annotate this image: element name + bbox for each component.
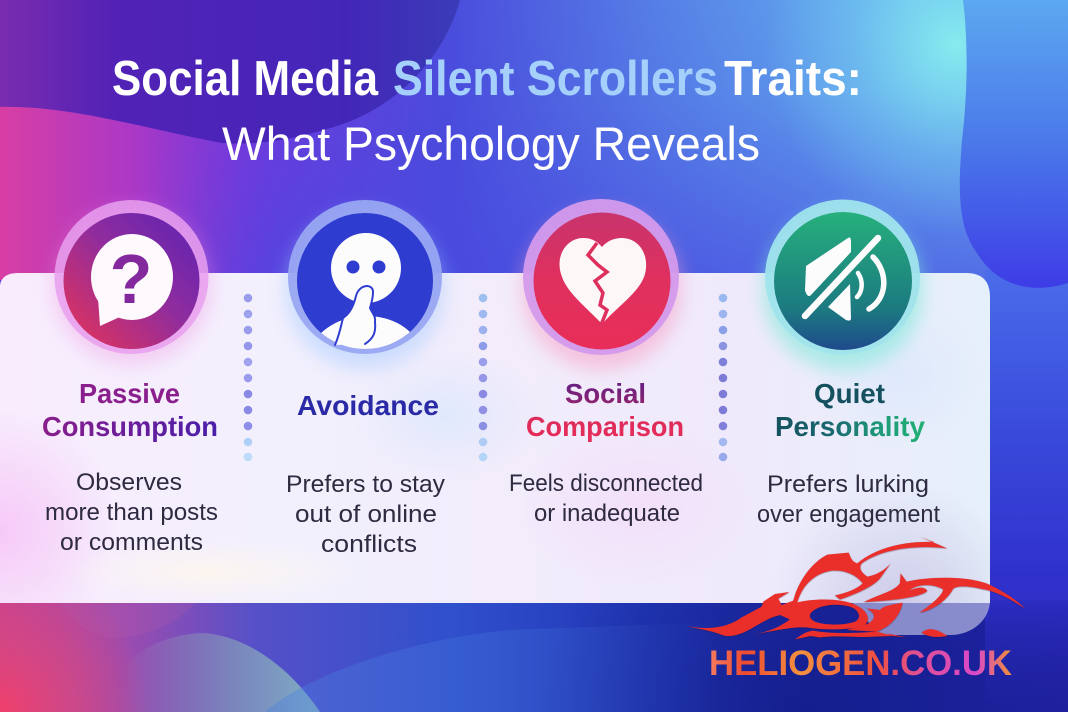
text: avoidance description: out of online [295, 501, 437, 528]
text: passive description: Observes [76, 469, 182, 496]
divider dots 1 [244, 294, 252, 461]
heading: quiet personality: Quiet [814, 378, 885, 409]
text: passive description: or comments [60, 529, 203, 556]
heading: quiet personality [775, 378, 925, 442]
shape: pink wave [0, 107, 300, 280]
heading: social comparison: Social [565, 378, 646, 409]
text: avoidance description [286, 471, 445, 558]
divider dots 2 [479, 294, 487, 461]
text: passive description: more than posts [45, 499, 218, 526]
title [112, 52, 862, 170]
heading: avoidance: Avoidance [297, 390, 439, 421]
divider dots 3 [719, 294, 727, 461]
title: Silent Scrollers [393, 52, 718, 106]
icon: broken heart [534, 212, 670, 350]
column: social comparison [509, 199, 703, 527]
column: passive consumption [42, 200, 218, 556]
logo: tribal flame mark [687, 537, 1025, 639]
text: social description: Feels disconnected [509, 470, 703, 497]
title: Traits: [724, 52, 862, 106]
shape: right strip [985, 270, 1068, 712]
shape: top-left dark blob [0, 0, 460, 144]
shape: right blob [960, 0, 1068, 288]
heading: passive consumption: Passive [79, 378, 180, 409]
text: passive description [45, 469, 218, 556]
text: social description: or inadequate [534, 500, 680, 527]
title: Social Media [112, 52, 379, 106]
panel [0, 273, 990, 635]
text: avoidance description: conflicts [321, 531, 417, 558]
heading: quiet personality: Personality [775, 411, 925, 442]
icon: question speech bubble: ? [110, 240, 152, 318]
icon: muted speaker [774, 212, 912, 350]
text: social description [509, 470, 703, 527]
text: quiet description [757, 471, 940, 528]
icon: shushing face [297, 213, 433, 360]
title: What Psychology Reveals [222, 117, 760, 170]
text: quiet description: over engagement [757, 501, 940, 528]
text: avoidance description: Prefers to stay [286, 471, 445, 498]
heading: social comparison: Comparison [526, 411, 684, 442]
shape: lower band [0, 600, 1068, 712]
logo text: heliogen.co.uk: HELIOGEN.CO.UK [709, 644, 1012, 683]
heading: passive consumption: Consumption [42, 411, 218, 442]
column: avoidance [285, 200, 445, 558]
column: quiet personality [757, 200, 940, 528]
text: quiet description: Prefers lurking [767, 471, 929, 498]
heading: passive consumption [42, 378, 218, 442]
icon: question speech bubble [64, 213, 200, 349]
heading: social comparison [526, 378, 684, 442]
